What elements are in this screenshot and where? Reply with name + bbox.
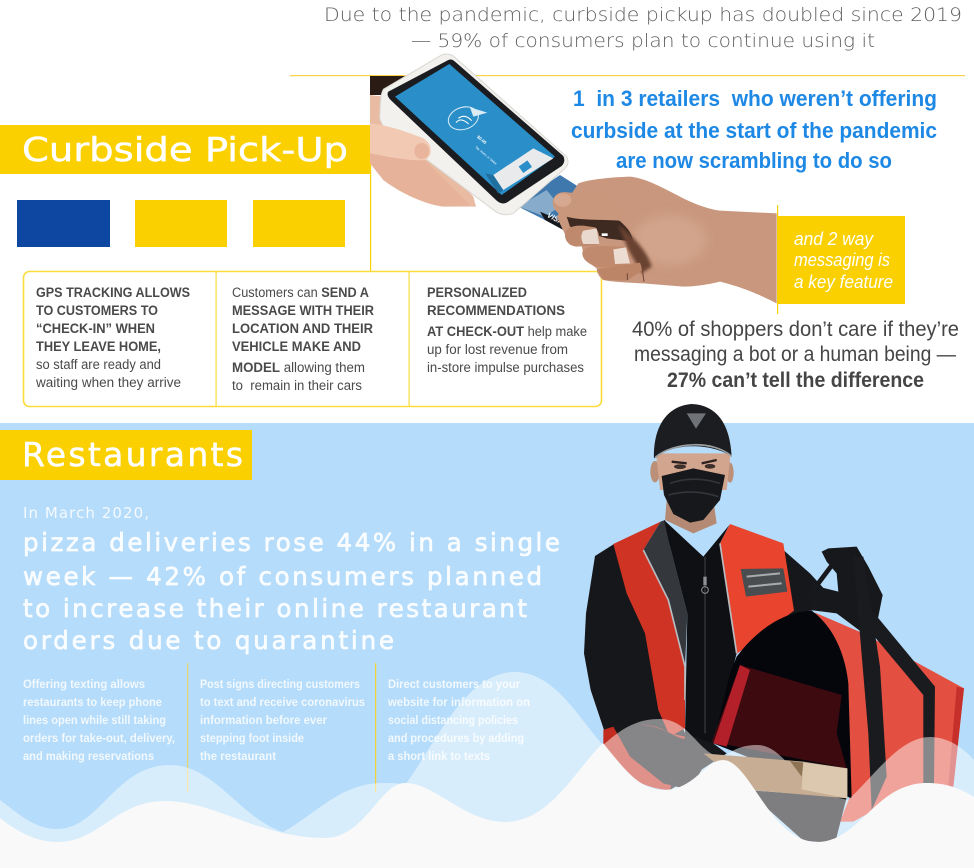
text: offering texting: Offering texting allows	[23, 677, 145, 691]
text: GPS tracking: GPS TRACKING ALLOWS	[36, 285, 190, 300]
vest left	[613, 522, 685, 737]
lower glove	[613, 724, 727, 790]
shirt	[664, 520, 737, 743]
text: personalized recommendations: PERSONALIZED	[427, 285, 527, 300]
mask	[662, 468, 725, 523]
text: personalized recommendations: up for lost revenue from	[427, 342, 568, 357]
card: VISA	[546, 210, 565, 226]
panel: three curbside features	[24, 271, 602, 407]
text: offering texting: orders for take-out, delivery,	[23, 731, 175, 745]
text: send a message: LOCATION AND THEIR	[232, 321, 373, 336]
text: send a message	[232, 285, 374, 393]
jacket	[584, 543, 830, 790]
text: post signs: stepping foot inside	[200, 731, 304, 745]
pizza delivery statistic: pizza deliveries rose 44% in a single	[23, 528, 560, 557]
text: send a message: Customers can SEND A	[232, 285, 369, 300]
intro statement: Due to the pandemic, curbside pickup has doubled since 2019	[324, 4, 962, 26]
text: GPS tracking: THEY LEAVE HOME,	[36, 339, 161, 354]
statistic: shoppers and bots: messaging a bot or a human being —	[634, 343, 956, 366]
text: post signs: information before ever	[200, 713, 327, 727]
panel: restaurants background	[0, 423, 974, 868]
pizza delivery statistic: orders due to quarantine	[23, 626, 394, 655]
statistic: shoppers and bots: 27% can’t tell the difference	[667, 369, 924, 392]
text: direct customers: Direct customers to your	[388, 677, 520, 691]
blue statistic: 1 in 3 retailers: curbside at the start of the pandemic	[571, 118, 937, 143]
text: send a message: VEHICLE MAKE AND	[232, 339, 361, 354]
blue statistic: 1 in 3 retailers: are now scrambling to do so	[616, 148, 892, 173]
bag bottom	[747, 790, 847, 843]
wave: translucent layer	[0, 672, 974, 868]
text: direct customers: a short link to texts	[388, 749, 490, 763]
text: send a message: MODEL allowing them	[232, 360, 365, 375]
callout: two way messaging: messaging is	[794, 250, 890, 270]
text: offering texting: and making reservations	[23, 749, 154, 763]
text: GPS tracking: “CHECK-IN” WHEN	[36, 321, 155, 336]
text: send a message: to remain in their cars	[232, 378, 362, 393]
bag	[815, 613, 964, 822]
heading band: Curbside Pick-Up	[0, 125, 370, 174]
text: post signs: to text and receive coronavirus	[200, 695, 365, 709]
callout: two way messaging	[777, 205, 905, 314]
vest right	[720, 524, 794, 654]
pizza delivery statistic: to increase their online restaurant	[23, 594, 527, 623]
text: offering texting	[23, 677, 175, 763]
glove	[810, 547, 883, 633]
photo: delivery worker with bag	[584, 404, 964, 843]
card-holding hand	[553, 177, 777, 303]
blue statistic: 1 in 3 retailers	[571, 86, 937, 173]
heading band: Restaurants: Restaurants	[22, 435, 243, 474]
text: GPS tracking: so staff are ready and	[36, 357, 161, 372]
color blocks	[17, 200, 345, 247]
text: personalized recommendations: in-store impulse purchases	[427, 360, 584, 375]
text: direct customers	[387, 677, 530, 763]
wave: front layer	[0, 743, 974, 868]
pizza box	[703, 753, 847, 798]
card	[515, 175, 590, 233]
text: personalized recommendations	[427, 285, 587, 375]
text: offering texting: lines open while still taking	[23, 713, 166, 727]
pizza delivery statistic: In March 2020,	[23, 504, 149, 522]
terminal and holding hand	[370, 54, 568, 215]
text: send a message: MESSAGE WITH THEIR	[232, 303, 374, 318]
text: direct customers: social distancing policies	[388, 713, 518, 727]
blue statistic: 1 in 3 retailers: 1 in 3 retailers who weren’t offering	[573, 86, 937, 111]
text: GPS tracking	[35, 285, 190, 390]
cap	[654, 404, 732, 458]
statistic: shoppers and bots: 40% of shoppers don’t care if they’re	[632, 318, 959, 341]
intro statement: — 59% of consumers plan to continue using it	[411, 30, 875, 52]
text: direct customers: website for information on	[387, 695, 530, 709]
statistic: shoppers and bots	[632, 318, 959, 392]
terminal and holding hand: Tap, Insert, or Swipe	[474, 145, 498, 166]
text: direct customers: and procedures by adding	[388, 731, 524, 745]
callout: two way messaging: a key feature	[794, 272, 893, 292]
text: personalized recommendations: RECOMMENDATIONS	[427, 303, 565, 318]
intro statement	[324, 4, 962, 52]
text: GPS tracking: TO CUSTOMERS TO	[36, 303, 158, 318]
callout: two way messaging: and 2 way	[794, 229, 874, 249]
text: post signs	[200, 677, 365, 763]
text: offering texting: restaurants to keep phone	[23, 695, 162, 709]
heading band: Curbside Pick-Up: Curbside Pick-Up	[22, 130, 348, 169]
neck and face	[665, 500, 717, 533]
text: post signs: the restaurant	[200, 749, 276, 763]
terminal and holding hand: $0.00	[476, 134, 488, 145]
text: GPS tracking: waiting when they arrive	[35, 375, 181, 390]
pizza delivery statistic: week — 42% of consumers planned	[23, 562, 542, 591]
text: post signs: Post signs directing customers	[200, 677, 360, 691]
text: personalized recommendations: AT CHECK-OUT help make	[427, 324, 587, 339]
photo: hands with card terminal	[370, 54, 777, 303]
bag straps	[853, 557, 887, 810]
heading band: Restaurants	[0, 430, 252, 480]
pizza delivery statistic	[23, 504, 560, 655]
